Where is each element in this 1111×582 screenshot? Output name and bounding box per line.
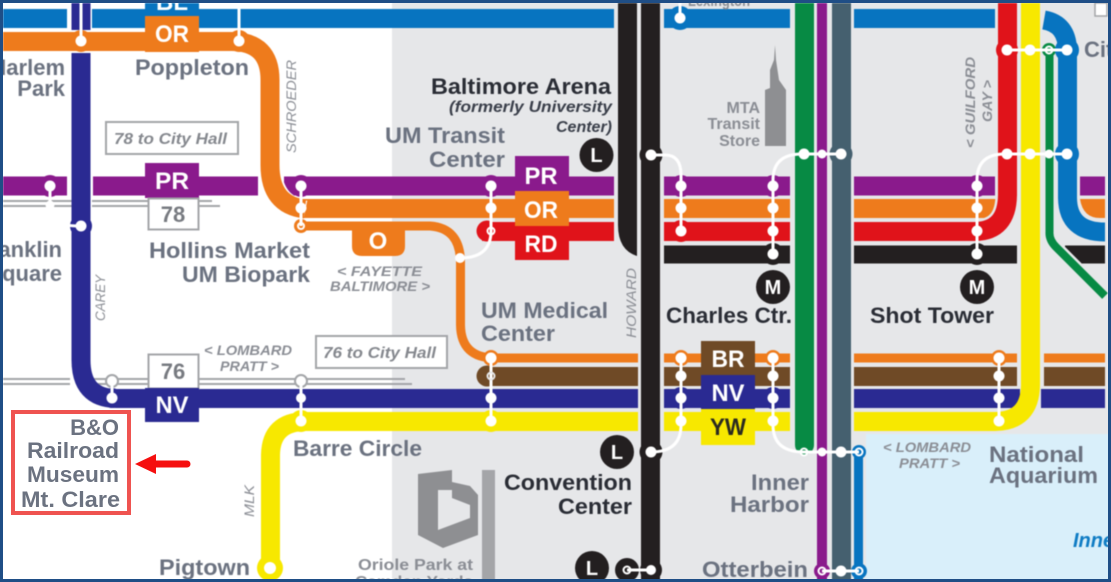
yellow line [270,3,1030,565]
badge: BR NV YW [701,341,755,445]
street: Lombard Pratt right [883,439,971,471]
icon: L and M circles: M [969,277,985,299]
badge: PR and 78 [145,163,199,230]
icon: L and M circles: L [611,442,623,464]
street: Guilford Gay: < GUILFORD [962,57,978,148]
label: Charles Ctr.: Charles Ctr. [666,303,792,328]
label: Convention Center [504,470,632,519]
badge: 76 and NV: NV [156,392,188,419]
label: Harlem Park [0,55,66,101]
black line left branch [618,3,637,256]
street labels [92,57,995,517]
label: Shot Tower: Shot Tower [870,303,994,328]
badge: PR OR RD: PR [524,163,558,190]
label: MTA Transit Store: MTA [727,100,760,117]
label: Harlem Park: Park [17,76,66,101]
orange thin line horizontal [491,354,1105,362]
label: UM Transit Center: Center [429,147,505,172]
orange line horizontal [300,199,1105,218]
callout: B&O Railroad Museum highlight: Railroad [27,438,119,463]
street: Lombard Pratt left [204,342,292,374]
badge: PR and 78: PR [155,168,189,195]
label: Baltimore Arena: Baltimore Arena [431,74,612,99]
label: MTA Transit Store: Store [719,133,760,150]
label: National Aquarium: Aquarium [989,463,1098,488]
label: MTA Transit Store [708,100,761,150]
callout: 78 to City Hall [106,122,238,154]
ring station dots [108,46,1052,574]
street: Fayette Baltimore: < FAYETTE [337,263,423,279]
label: Hollins Market UM Biopark: Hollins Market [149,238,311,263]
label: Otterbein: Otterbein [702,557,808,582]
street: Lombard Pratt right: PRATT > [899,455,960,471]
badge: PR OR RD: OR [524,197,558,224]
green branch line [1049,48,1105,296]
arrow pointing to B&O label [135,454,187,474]
street: Lombard Pratt right: < LOMBARD [883,439,971,455]
callout: 78 to City Hall: 78 to City Hall [114,131,228,148]
street: Schroeder: SCHROEDER [283,60,299,153]
red line curve and casing [854,3,1008,232]
badge: BR NV YW: NV [712,380,744,407]
street: MLK: MLK [241,484,257,517]
badge: 76 and NV: 76 [161,359,185,384]
icon: L and M circles: M [765,277,781,299]
label: Franklin Square [0,237,62,286]
orange branch curve to medical center [296,226,495,358]
badge: O: O [369,228,387,255]
callout: 76 to City Hall: 76 to City Hall [323,345,437,362]
label: Pigtown: Pigtown [159,555,250,580]
label: UM Medical Center: Center [481,321,555,346]
purple line horizontal [3,176,1105,196]
badge: PR OR RD [515,156,569,260]
bus route 78 double line [3,201,220,206]
red line horizontal [482,222,790,241]
callout: B&O Railroad Museum highlight: Mt. Clare [21,487,120,512]
label: Hollins Market UM Biopark [149,238,311,287]
label: Inner Harbor: Inner [751,470,809,495]
badge: PR OR RD: RD [524,231,558,258]
street: Fayette Baltimore: BALTIMORE > [330,278,430,294]
label: National Aquarium: National [989,442,1084,467]
street: Fayette Baltimore [330,263,430,294]
label: Oriole Park at Camden Yards [355,557,474,582]
icon: Oriole Park stadium [418,470,478,548]
label: Inner Harbor: Harbor [730,492,809,517]
callout: B&O Railroad Museum highlight: Museum [27,462,119,487]
icon: MTA store building [765,45,786,146]
badge: 76 and NV [145,354,199,422]
badge: BL / OR top [145,0,199,52]
small box top right [1095,3,1107,16]
street: Guilford Gay [962,57,995,148]
badge: BL / OR top: OR [155,21,189,48]
label: Oriole Park at Camden Yards: Oriole Park at [358,557,474,574]
label: Barre Circle: Barre Circle [293,436,422,461]
street: Howard: HOWARD [623,268,639,338]
callout: 76 to City Hall [316,336,447,368]
label: Convention Center: Convention [504,470,632,495]
label: Hollins Market UM Biopark: UM Biopark [182,262,311,287]
label: UM Medical Center: UM Medical [481,298,608,323]
label: UM Transit Center: UM Transit [385,123,506,148]
street: Carey: CAREY [92,273,108,321]
bus route 76 double line [3,379,412,384]
street: Lombard Pratt left: PRATT > [220,358,279,374]
label: Poppleton: Poppleton [135,55,249,80]
badge: BR NV YW: YW [710,414,746,441]
brown line horizontal [486,367,1105,386]
label: Inner Harbor [730,470,809,517]
street: Guilford Gay: GAY > [979,80,995,122]
badge: O [352,228,405,256]
badge: BR NV YW: BR [712,346,744,373]
stadium bar [482,470,495,582]
callout: B&O Railroad Museum highlight [13,412,129,513]
black line horizontal [664,246,1105,264]
label: UM Medical Center [481,298,608,346]
black line main vertical [641,3,660,582]
street: Lombard Pratt left: < LOMBARD [204,342,292,358]
blue line horizontal [3,9,995,28]
blue line right curve [1044,20,1105,232]
callout: B&O Railroad Museum highlight: B&O [70,415,119,440]
icon: L and M circles: L [590,145,603,167]
badge: PR and 78: 78 [161,202,185,227]
navy line [81,3,1105,398]
label: Convention Center: Center [558,494,632,519]
label: Baltimore Arena: (formerly University [449,99,613,116]
icon: L and M circles [575,138,994,582]
label: MTA Transit Store: Transit [708,116,761,133]
central vertical lines: green, purple, slate, blue [794,3,863,582]
orange line top with curve [3,42,305,212]
label: National Aquarium [989,442,1098,488]
label: Baltimore Arena: Center) [556,119,612,136]
label: Baltimore Arena [431,74,613,136]
icon: L and M circles: L [586,558,598,580]
label: UM Transit Center [385,123,506,172]
